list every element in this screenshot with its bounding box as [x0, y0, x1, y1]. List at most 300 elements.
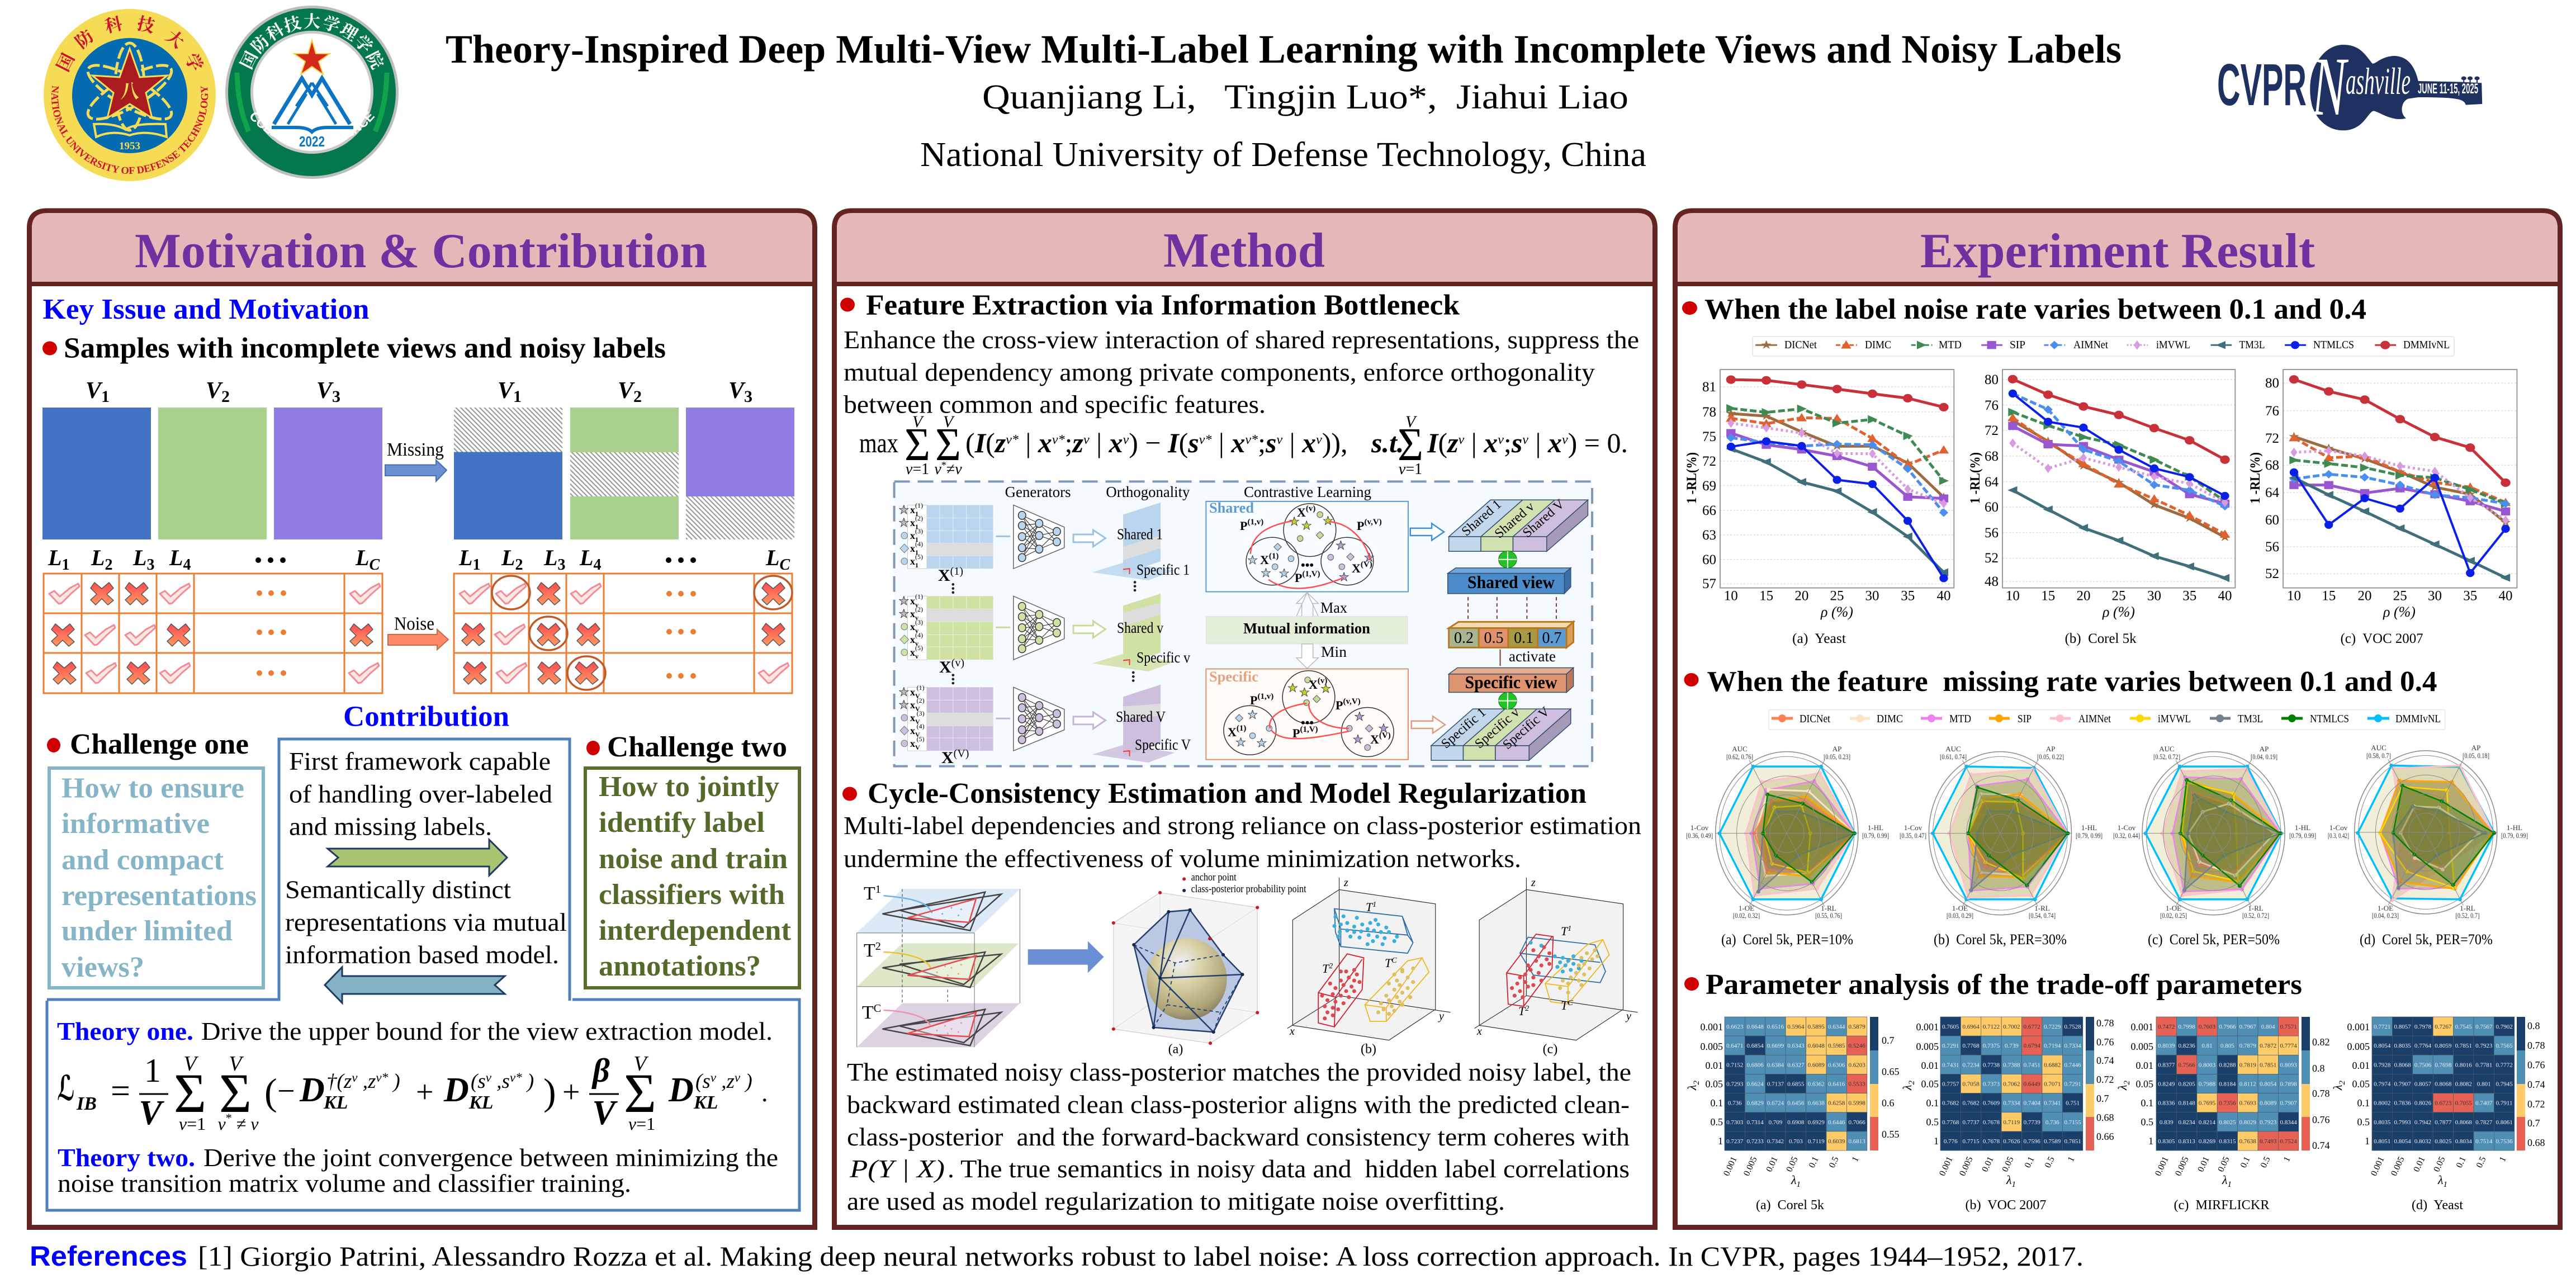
axis labels: 1: [1934, 1135, 1939, 1147]
heatmap cells: 0.7603: [2199, 1024, 2216, 1030]
colorbar: [2086, 1017, 2094, 1150]
legend: line charts: SIP: [2010, 339, 2025, 351]
formula: L_IB: V: [592, 1094, 618, 1132]
sample labels: x: [910, 725, 915, 736]
logo: College of Science seal: COLLEGE OF SCIENCE: [250, 111, 375, 138]
heatmap cells: 0.8054: [2260, 1081, 2277, 1087]
diagram labels: Shared 1: [1117, 526, 1163, 543]
axis labels: 0.05: [1784, 1156, 1800, 1173]
figure labels: (a): [1168, 1042, 1183, 1057]
heatmap cells: 0.8249: [2158, 1081, 2175, 1087]
formula: L_IB: *: [226, 1111, 232, 1125]
legend: radar charts: NTMLCS: [2310, 713, 2349, 725]
incomplete view blocks: [454, 408, 794, 539]
label headings left: 3: [146, 556, 154, 574]
logo: CVPR Nashville guitar: JUNE 11-15, 2025: [2418, 81, 2478, 97]
heatmap cells: 0.7923: [2475, 1043, 2493, 1049]
radar captions: (d) Corel 5k, PER=70%: [2360, 931, 2493, 948]
radar axis labels: 1-OE: [1952, 904, 1968, 912]
heatmap cells: 0.7945: [2496, 1081, 2513, 1087]
formula: max objective: x: [1547, 427, 1562, 458]
formula: max objective: z: [1071, 427, 1083, 458]
contrastive labels: P: [1292, 726, 1300, 740]
formula: max objective: ;: [1065, 427, 1072, 458]
formula: max objective: ) = 0.: [1568, 427, 1628, 458]
logo: National University of Defense Technology seal: 八: [120, 76, 139, 103]
sample labels: V: [915, 731, 920, 738]
logo: CVPR Nashville guitar: [2217, 40, 2482, 133]
formula: max objective: V: [912, 413, 925, 431]
view labels: 3: [744, 387, 752, 406]
axis labels: 0.01: [1764, 1156, 1780, 1173]
figure labels: x: [1289, 1025, 1295, 1038]
axis labels: 0.1: [1807, 1156, 1821, 1169]
label headings left: L: [356, 545, 369, 570]
figure labels: z: [1531, 877, 1536, 889]
panel header band: [32, 213, 812, 284]
heatmap cells: 0.6882: [2044, 1062, 2061, 1068]
heatmap cells: 0.8089: [2260, 1100, 2277, 1107]
legend: radar charts: DICNet: [1800, 713, 1830, 725]
radar axis labels: 1-OE: [1739, 904, 1754, 912]
sample labels: x: [910, 543, 915, 554]
heatmap cells: 0.7698: [2435, 1062, 2452, 1068]
diagram shapes: [894, 481, 1592, 766]
axis labels: 0.7: [2096, 1093, 2109, 1104]
heatmap cells: 0.7303: [1726, 1119, 1744, 1126]
heatmap cells: 0.7768: [1962, 1043, 1980, 1049]
caption: (b) VOC 2007: [1966, 1198, 2046, 1213]
heatmap cells: 0.7872: [2260, 1043, 2276, 1049]
heatmap cells: 0.7942: [2414, 1119, 2431, 1126]
paragraph: feature extraction: Enhance the cross-view interaction of shared representations, suppress the: [844, 325, 1639, 354]
bullet heading: feature missing: When the feature missing rate varies between 0.1 and 0.4: [1707, 666, 2437, 698]
axis labels: 0.001: [2131, 1021, 2153, 1033]
y axis ticks: 81: [1702, 380, 1716, 395]
sample labels: x: [910, 712, 915, 723]
axis labels: 1: [1797, 1180, 1801, 1189]
heatmap cells: 0.5964: [1787, 1024, 1805, 1030]
axis labels: 0.01: [1921, 1060, 1939, 1071]
radar axis labels: [0.61, 0.74]: [1940, 752, 1967, 761]
sample labels: x: [910, 699, 915, 711]
heatmap cells: 0.8057: [2414, 1081, 2432, 1087]
axis labels: 0.001: [1722, 1156, 1739, 1177]
radar axis labels: [0.62, 0.76]: [1726, 752, 1753, 761]
axis labels: 0.1: [2455, 1156, 2468, 1169]
heatmap cells: 0.6813: [1848, 1138, 1865, 1145]
caption: (d) Yeast: [2412, 1198, 2463, 1213]
diagram labels: Generators: [1005, 484, 1071, 500]
view stack labels: Specific 1: [1438, 705, 1489, 751]
contrastive labels: (1,v): [1247, 518, 1263, 527]
x axis ticks: ρ (%): [2102, 604, 2135, 620]
figure labels: C: [1391, 956, 1397, 965]
line chart: corel 5k: [1968, 370, 2235, 646]
logo: CVPR Nashville guitar: N: [2311, 40, 2348, 133]
heatmap cells: 0.6794: [2024, 1043, 2040, 1049]
heatmap cells: 0.7055: [2455, 1100, 2472, 1107]
heatmap cells: 0.6964: [1962, 1024, 1980, 1030]
heatmap cells: 0.7122: [1983, 1024, 2000, 1030]
axis labels: λ: [2331, 1085, 2345, 1090]
formula: max objective: v=1: [1399, 461, 1422, 478]
sample labels: (5): [915, 553, 923, 561]
panel frame: [29, 211, 815, 1228]
heatmap cells: 0.6362: [1808, 1081, 1825, 1087]
heatmap cells: 0.7137: [1767, 1081, 1784, 1087]
heatmap cells: 0.7879: [2239, 1043, 2256, 1049]
sample labels: 1: [915, 523, 918, 531]
axis labels: 0.001: [1938, 1156, 1955, 1177]
panel: motivation and contribution: [27, 211, 817, 1228]
radar axis labels: AP: [1832, 745, 1841, 753]
y axis ticks: 76: [2265, 404, 2279, 419]
axis labels: 1: [2148, 1135, 2153, 1147]
heatmap cells: 0.7605: [1942, 1024, 1959, 1030]
view stack labels: Specific V: [1500, 704, 1553, 752]
heatmap cells: 0.8184: [2219, 1081, 2236, 1087]
heatmap cells: 0.7237: [1726, 1138, 1744, 1145]
sample labels: x: [910, 634, 915, 645]
sample labels: v: [915, 627, 918, 634]
axis labels: 0.01: [1980, 1156, 1996, 1173]
axis labels: 0.78: [2312, 1088, 2330, 1099]
radar axis labels: [0.54, 0.74]: [2029, 911, 2056, 920]
x axis ticks: 10: [1724, 588, 1738, 604]
diagram labels: (1): [950, 565, 963, 577]
axis labels: 0.78: [2527, 1040, 2545, 1051]
radar axis labels: 1-RL: [2248, 904, 2264, 912]
heatmap cells: 0.6516: [1767, 1024, 1784, 1030]
sample labels: (4): [915, 631, 923, 639]
radar charts: [1686, 744, 2528, 948]
heatmap cells: 0.7923: [2260, 1119, 2277, 1126]
formula: L_IB: D: [668, 1071, 694, 1109]
axis labels: 0.05: [2432, 1156, 2447, 1173]
heatmap cells: 0.7768: [1942, 1119, 1959, 1126]
x axis ticks: 15: [2322, 588, 2336, 604]
heatmap: yeast: [2331, 1017, 2545, 1213]
heatmap cells: 0.7545: [2455, 1024, 2472, 1030]
heatmap cells: 0.8313: [2178, 1138, 2195, 1145]
caption: (c) MIRFLICKR: [2174, 1198, 2270, 1213]
formula: L_IB: Σ: [219, 1062, 252, 1124]
formula: max objective: )),: [1322, 427, 1348, 458]
formula: max objective: v=1: [906, 461, 929, 478]
formula: L_IB: [57, 1052, 768, 1134]
formula: max objective: |: [1019, 427, 1038, 458]
radar axis labels: [0.79, 0.99]: [2289, 831, 2316, 840]
challenge one box: [49, 768, 263, 988]
axis labels: 0.82: [2312, 1036, 2330, 1048]
radar axis labels: [0.58, 0.7]: [2366, 751, 2391, 760]
figure labels: T: [1518, 1004, 1525, 1018]
heatmap cells: 0.6806: [1746, 1062, 1764, 1068]
heatmap cells: 0.7431: [1942, 1062, 1959, 1068]
heatmap cells: 0.7772: [2496, 1062, 2513, 1068]
heatmap cells: 0.6829: [1746, 1100, 1764, 1107]
axis labels: 0.74: [2096, 1055, 2114, 1066]
logo: National University of Defense Technology seal: 防: [72, 26, 97, 52]
formula: L_IB: β: [591, 1052, 610, 1089]
contribution text one: and missing labels.: [289, 812, 492, 841]
challenge two box: identify label: [599, 807, 765, 839]
formula: max objective: v: [1276, 433, 1282, 447]
heatmap cells: 0.8305: [2158, 1138, 2175, 1145]
contrastive labels: P: [1250, 693, 1257, 707]
figure labels: T: [864, 940, 875, 961]
sample labels: v: [915, 640, 918, 647]
heatmap cells: 0.8061: [2496, 1119, 2513, 1126]
view labels: V: [86, 378, 101, 404]
mutual information labels: Min: [1321, 643, 1347, 660]
heatmap cells: 0.7334: [2003, 1100, 2020, 1107]
view labels: V: [728, 378, 744, 404]
heatmap cells: 0.6471: [1726, 1043, 1743, 1049]
heatmap cells: 0.7764: [2414, 1043, 2432, 1049]
axis labels: 0.01: [2412, 1156, 2427, 1173]
contrastive labels: P: [1357, 519, 1364, 533]
radar axis labels: 1-HL: [2081, 823, 2097, 832]
sample labels: v: [915, 652, 918, 660]
heatmap cells: 0.776: [1944, 1138, 1958, 1145]
heatmap cells: 0.6384: [1767, 1062, 1784, 1068]
y axis ticks: 48: [1985, 574, 1999, 589]
mutual information labels: Mutual information: [1243, 620, 1370, 637]
x axis ticks: ρ (%): [1820, 604, 1853, 620]
radar axis labels: [0.3, 0.42]: [2328, 831, 2349, 840]
x axis ticks: 35: [2182, 588, 2196, 604]
radar captions: (b) Corel 5k, PER=30%: [1934, 931, 2067, 948]
heatmap cells: 0.7524: [2280, 1138, 2297, 1145]
heatmap cells: 0.6449: [2024, 1081, 2040, 1087]
heatmap cells: 0.7071: [2044, 1081, 2061, 1087]
sample labels: (3): [915, 527, 923, 535]
axis labels: 0.1: [1711, 1097, 1723, 1109]
formula: max objective: v: [1459, 433, 1465, 447]
figure labels: y: [1625, 1010, 1631, 1022]
paragraph: estimation details: The estimated noisy class-posterior matches the provided noisy label, the: [847, 1058, 1631, 1086]
formula: L_IB: v: [486, 1071, 492, 1085]
formula: max objective: v: [1522, 433, 1528, 447]
formula: L_IB: =: [111, 1072, 130, 1110]
heatmap cells: 0.703: [1789, 1138, 1803, 1145]
x axis ticks: 25: [2112, 588, 2125, 604]
formula: max objective: x: [1038, 427, 1052, 458]
theory one: Theory one.: [57, 1017, 193, 1045]
radar axis labels: 1-RL: [2460, 904, 2475, 912]
authors: Quanjiang Li, Tingjin Luo*, Jiahui Liao: [982, 78, 1628, 116]
arrow: noise: [388, 629, 448, 650]
paragraph: feature extraction: mutual dependency among private components, enforce orthogonality: [844, 358, 1595, 386]
formula: max objective: v: [1316, 433, 1322, 447]
formula: max objective: v*: [1006, 433, 1019, 447]
heatmap cells: 0.736: [2045, 1119, 2059, 1126]
axis labels: 0.001: [1701, 1021, 1723, 1033]
heatmap cells: 0.7571: [2280, 1024, 2297, 1030]
sample labels: 1: [915, 510, 918, 518]
formula: max objective: s.t.: [1371, 427, 1404, 458]
formula: L_IB: v: [711, 1071, 717, 1085]
axis labels: 0.005: [2389, 1156, 2407, 1177]
x axis ticks: 40: [2218, 588, 2232, 604]
figure labels: T: [1561, 924, 1568, 938]
formula: max objective: |: [1090, 427, 1109, 458]
axis labels: 0.01: [2196, 1156, 2212, 1173]
axis labels: 0.01: [2352, 1060, 2370, 1071]
formula: L_IB: .: [761, 1078, 768, 1107]
radar axis labels: [0.04, 0.23]: [2372, 911, 2399, 920]
heatmap cells: 0.7002: [2003, 1024, 2020, 1030]
heatmap cells: 0.8016: [2455, 1062, 2472, 1068]
heatmap cells: 0.6039: [1828, 1138, 1845, 1145]
view labels: V: [618, 378, 633, 404]
figure: transition matrix simplex: [857, 872, 1637, 1057]
heatmap cells: 0.7911: [2496, 1100, 2513, 1107]
x axis ticks: 25: [2393, 588, 2407, 604]
figure labels: T: [1366, 900, 1372, 914]
formula: L_IB: +: [416, 1075, 434, 1110]
heatmap cells: 0.6089: [1808, 1062, 1825, 1068]
sample labels: x: [910, 530, 915, 541]
view stack labels: 0.2: [1454, 629, 1474, 647]
formula: max objective: |: [1464, 427, 1484, 458]
figure labels: x: [1476, 1025, 1482, 1038]
radar axis labels: [0.55, 0.76]: [1815, 911, 1842, 920]
legend: radar charts: DMMIvNL: [2395, 713, 2441, 725]
axis labels: 0.01: [2135, 1060, 2153, 1071]
x axis ticks: 40: [2499, 588, 2512, 604]
axis labels: 0.8: [2312, 1063, 2324, 1074]
references: [1] Giorgio Patrini, Alessandro Rozza et al. Making deep neural networks robust to label noise: A loss correction approach. In CVPR, pages 1944–1952, 2017.: [198, 1240, 2083, 1272]
radar axis labels: 1-RL: [2034, 904, 2050, 912]
challenge one box: representations: [61, 880, 257, 912]
mutual information labels: [1243, 599, 1370, 660]
panel header band: [837, 213, 1652, 284]
heatmap cells: 0.5533: [1848, 1081, 1865, 1087]
formula: L_IB: V: [633, 1052, 648, 1076]
formula: L_IB: ): [543, 1071, 556, 1113]
contrastive labels: (V): [1379, 731, 1391, 740]
references: References: [30, 1240, 187, 1272]
radar captions: (a) Corel 5k, PER=10%: [1721, 931, 1853, 948]
radar axis labels: [0.02, 0.32]: [1733, 911, 1760, 920]
heatmap cells: 0.6772: [2024, 1024, 2040, 1030]
heatmap cells: 0.7589: [2044, 1138, 2061, 1145]
bullet heading: Samples with incomplete views and noisy labels: [64, 332, 666, 364]
theory two: noise transition matrix volume and classifier training.: [58, 1169, 631, 1197]
legend: line charts: [1753, 337, 2454, 356]
heatmap cells: 0.8025: [2219, 1119, 2236, 1126]
formula: max objective: s: [1511, 427, 1522, 458]
label headings left: L: [501, 545, 515, 570]
legend: radar charts: [1769, 710, 2445, 730]
sample labels: (1): [915, 593, 923, 600]
legend: line charts: DIMC: [1865, 339, 1891, 351]
paragraph: feature extraction: [844, 325, 1639, 419]
contrastive labels: (v): [1306, 504, 1315, 513]
label headings left: L: [48, 545, 61, 570]
formula: L_IB: ,z: [357, 1070, 376, 1093]
axis labels: 0.5: [2043, 1156, 2057, 1169]
radar axis labels: AUC: [2159, 745, 2175, 753]
heatmap cells: 0.804: [2261, 1024, 2275, 1030]
figure labels: y: [1438, 1010, 1444, 1022]
plot lines: [2283, 370, 2517, 588]
heatmap cells: 0.6203: [1848, 1062, 1865, 1068]
radar axis labels: [0.04, 0.19]: [2251, 752, 2277, 761]
axis labels: 0.001: [2347, 1021, 2370, 1033]
logo: National University of Defense Technology seal: 学: [181, 50, 206, 74]
legend: line charts: MTD: [1939, 339, 1962, 351]
logo: College of Science seal: 防: [248, 32, 273, 57]
radar axis labels: [0.52, 0.72]: [2242, 911, 2269, 920]
radar axis labels: AP: [2260, 745, 2269, 753]
paragraph: estimation details: backward estimated clean class-posterior aligns with the predicted clean-: [847, 1090, 1630, 1119]
x axis ticks: 15: [1759, 588, 1773, 604]
heatmap cells: 0.7695: [2199, 1100, 2216, 1107]
formula: max objective: |: [1528, 427, 1548, 458]
radar axis labels: [1686, 744, 2528, 920]
radar axis labels: 1-RL: [1821, 904, 1836, 912]
diagram labels: X: [941, 749, 954, 767]
logo: College of Science seal: 科: [263, 20, 287, 45]
x axis ticks: 10: [2287, 588, 2301, 604]
formula: max objective: |: [1282, 427, 1302, 458]
heatmap cells: [1940, 1017, 2083, 1150]
diagram labels: [938, 484, 1371, 767]
y axis ticks: 52: [2265, 566, 2279, 581]
theory two: Derive the joint convergence between minimizing the: [203, 1143, 778, 1172]
logo: CVPR Nashville guitar: ashville: [2346, 60, 2411, 102]
y axis ticks: [1985, 372, 1999, 589]
diagram labels: (v): [951, 657, 964, 669]
view labels: 1: [513, 387, 522, 406]
heatmap cells: 0.7493: [2260, 1138, 2277, 1145]
heatmap cells: 0.5879: [1848, 1024, 1865, 1030]
contribution text two: Semantically distinct: [285, 875, 511, 904]
formula: max objective: v: [1083, 433, 1090, 447]
challenge one box: under limited: [61, 915, 233, 947]
axis labels: 0.05: [1705, 1078, 1723, 1090]
figure labels: 2: [875, 940, 881, 953]
heatmap cells: 0.5895: [1808, 1024, 1825, 1030]
heatmap cells: 0.7993: [2394, 1119, 2411, 1126]
heading: Motivation & Contribution: [135, 224, 707, 278]
figure labels: (c): [1543, 1042, 1557, 1057]
diagram labels: Specific 1: [1137, 561, 1190, 578]
x axis ticks: 1 -RL(%): [1968, 452, 1983, 504]
formula: L_IB: ,s: [491, 1070, 510, 1093]
legend: line charts: DMMIvNL: [2403, 339, 2450, 351]
figure labels: class-posterior probability point: [1191, 883, 1306, 895]
radar axis labels: [0.79, 0.99]: [2501, 831, 2528, 840]
challenge two box: classifiers with: [599, 879, 785, 911]
logo: College of Science seal: 学: [351, 32, 376, 57]
formula: L_IB: v*: [510, 1071, 522, 1085]
label headings left: 1: [61, 556, 69, 574]
formula: L_IB: v=1: [628, 1114, 655, 1134]
heatmap cells: 0.7827: [2475, 1119, 2493, 1126]
formula: max objective: x: [1301, 427, 1316, 458]
radar axis labels: 1-Cov: [1904, 823, 1922, 832]
formula: L_IB: KL: [693, 1092, 718, 1113]
formula: max objective: ;: [1258, 427, 1266, 458]
legend: line charts: iMVWL: [2156, 339, 2190, 351]
axis labels: 0.7: [1882, 1035, 1894, 1046]
challenge two heading: Challenge two: [607, 731, 787, 763]
